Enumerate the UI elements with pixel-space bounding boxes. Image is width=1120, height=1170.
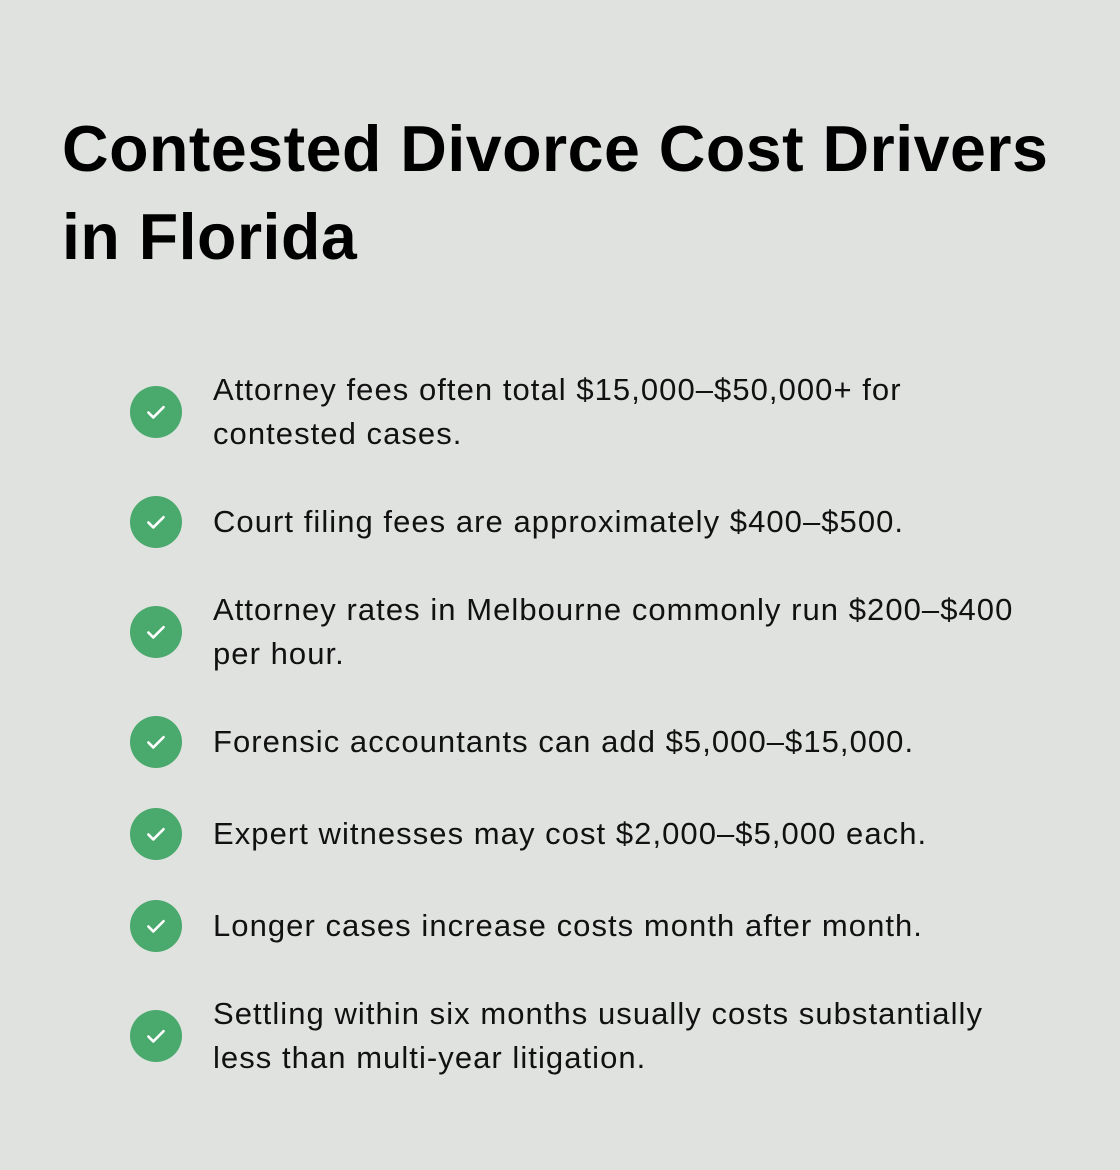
item: attorney fees: Attorney fees often total $15,000–$50,000+ for — [213, 372, 902, 407]
icon: check — [130, 900, 182, 952]
icon: check — [130, 386, 182, 438]
icon: check — [130, 606, 182, 658]
item: attorney fees — [130, 372, 902, 451]
item: rates: per hour. — [213, 636, 345, 671]
icon: check — [130, 496, 182, 548]
item: forensic — [130, 716, 914, 768]
icon: check — [130, 1010, 182, 1062]
title — [62, 113, 1048, 273]
item: attorney fees: contested cases. — [213, 416, 462, 451]
icon: check — [130, 716, 182, 768]
item: settling — [130, 996, 983, 1075]
title: Contested Divorce Cost Drivers — [62, 113, 1048, 185]
icon: check — [130, 808, 182, 860]
item: forensic: Forensic accountants can add $5,000–$15,000. — [213, 724, 914, 759]
item: court filing: Court filing fees are approximately $400–$500. — [213, 504, 904, 539]
item: longer cases: Longer cases increase costs month after month. — [213, 908, 923, 943]
item: settling: Settling within six months usually costs substantially — [213, 996, 983, 1031]
item: experts: Expert witnesses may cost $2,000–$5,000 each. — [213, 816, 927, 851]
title: in Florida — [62, 201, 357, 273]
item: experts — [130, 808, 927, 860]
item: rates — [130, 592, 1013, 671]
item: rates: Attorney rates in Melbourne commonly run $200–$400 — [213, 592, 1013, 627]
item: longer cases — [130, 900, 923, 952]
item: settling: less than multi-year litigation. — [213, 1040, 646, 1075]
item: court filing — [130, 496, 904, 548]
